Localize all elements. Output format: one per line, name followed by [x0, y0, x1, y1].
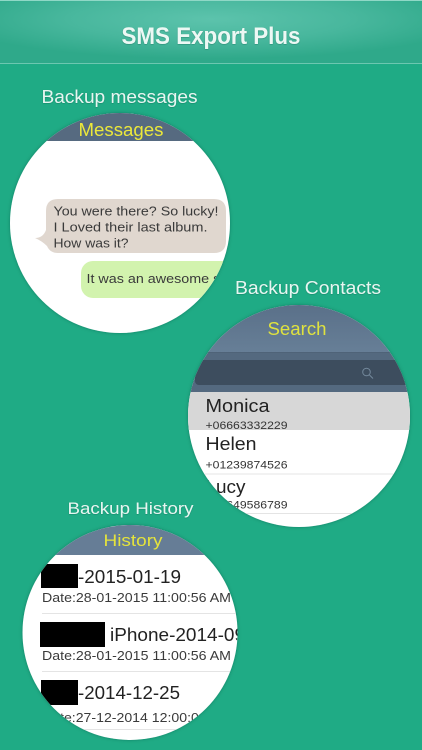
- contact row: Monica: +06663332229: [206, 420, 288, 432]
- sent message bubble: [81, 261, 224, 298]
- history nav bar: [56, 525, 204, 555]
- received message bubble: [35, 199, 226, 253]
- contact row: Lucy: [208, 480, 353, 514]
- history row 3: Date:27-12-2014 12:00:00 AM: [42, 711, 231, 725]
- contact row: Helen: +01239874526: [206, 460, 288, 472]
- contacts nav bar: [208, 305, 390, 353]
- nav title: search: Search: [268, 319, 326, 339]
- header bar: [0, 0, 422, 64]
- heading: backup messages: Backup messages: [42, 87, 198, 107]
- history row 2: Date:28-01-2015 11:00:56 AM: [42, 649, 231, 663]
- contact row: Helen: [205, 436, 394, 474]
- panel: history circle: [22, 525, 245, 740]
- history row 3: -2014-12-25: [78, 683, 180, 703]
- messages nav bar: [46, 113, 194, 141]
- history row 2: [40, 622, 245, 672]
- history row 2: iPhone-2014-09: [110, 625, 245, 645]
- contact row: Lucy: Lucy: [206, 477, 246, 497]
- contact row: Monica: [188, 392, 410, 432]
- history row 1: [41, 564, 237, 614]
- panel: contacts circle: [188, 305, 420, 527]
- title: SMS Export Plus: [122, 23, 300, 50]
- icon: magnifier: [363, 368, 373, 378]
- contact row: Lucy: +06649586789: [206, 500, 288, 512]
- search bar area: [188, 353, 420, 392]
- contact row: Helen: Helen: [206, 434, 256, 454]
- panel: messages circle: [10, 113, 251, 333]
- heading: backup contacts: Backup Contacts: [235, 278, 381, 298]
- heading: backup history: Backup History: [68, 499, 194, 518]
- received message bubble: You were there? So lucky!: [54, 204, 218, 218]
- contact row: Monica: Monica: [206, 396, 271, 416]
- received message bubble: How was it?: [54, 236, 128, 250]
- messages nav title: Messages: [78, 120, 164, 140]
- received message bubble: I Loved their last album.: [54, 220, 208, 234]
- history row 3: [41, 680, 198, 730]
- history nav title: History: [104, 531, 163, 550]
- sent message bubble: It was an awesome show: [86, 271, 247, 286]
- history row 1: -2015-01-19: [78, 567, 181, 587]
- history row 1: Date:28-01-2015 11:00:56 AM: [42, 591, 231, 605]
